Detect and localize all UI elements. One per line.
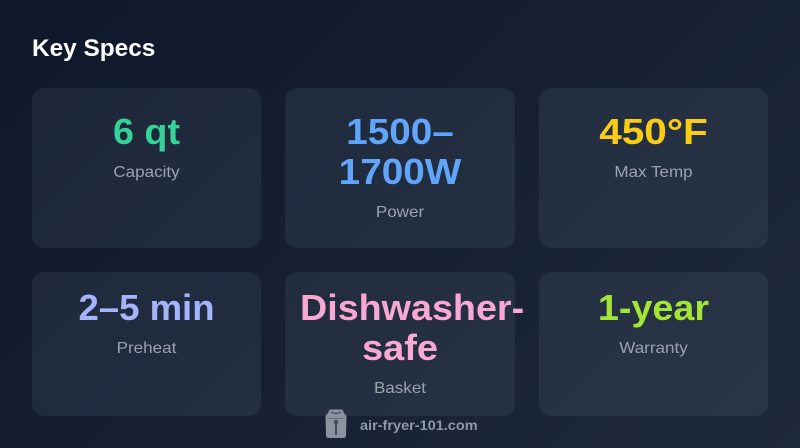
value: basket: Dishwasher- <box>300 287 524 328</box>
panel: warranty <box>539 272 768 416</box>
value: basket: safe <box>362 327 438 368</box>
site url: air-fryer-101.com <box>360 417 478 433</box>
value: power <box>339 111 462 192</box>
value: power: 1500– <box>346 111 454 152</box>
label: warranty: Warranty <box>619 340 688 357</box>
title: Key Specs <box>32 35 155 62</box>
panel: basket <box>285 272 515 416</box>
label: basket: Basket <box>374 380 426 397</box>
panel: capacity <box>32 88 261 248</box>
panel: power <box>285 88 515 248</box>
value: max temp: 450°F <box>599 111 708 152</box>
icon: air fryer <box>326 410 346 438</box>
value: power: 1700W <box>339 151 461 192</box>
value: preheat: 2–5 min <box>78 287 215 328</box>
label: capacity: Capacity <box>113 164 180 181</box>
panel: preheat <box>32 272 261 416</box>
panel: max temp <box>539 88 768 248</box>
value: basket <box>300 287 524 368</box>
footer: site logo <box>326 410 478 438</box>
value: warranty: 1-year <box>598 287 709 328</box>
label: power: Power <box>376 204 424 221</box>
label: max temp: Max Temp <box>614 164 693 181</box>
label: preheat: Preheat <box>117 340 176 357</box>
value: capacity: 6 qt <box>113 111 180 152</box>
